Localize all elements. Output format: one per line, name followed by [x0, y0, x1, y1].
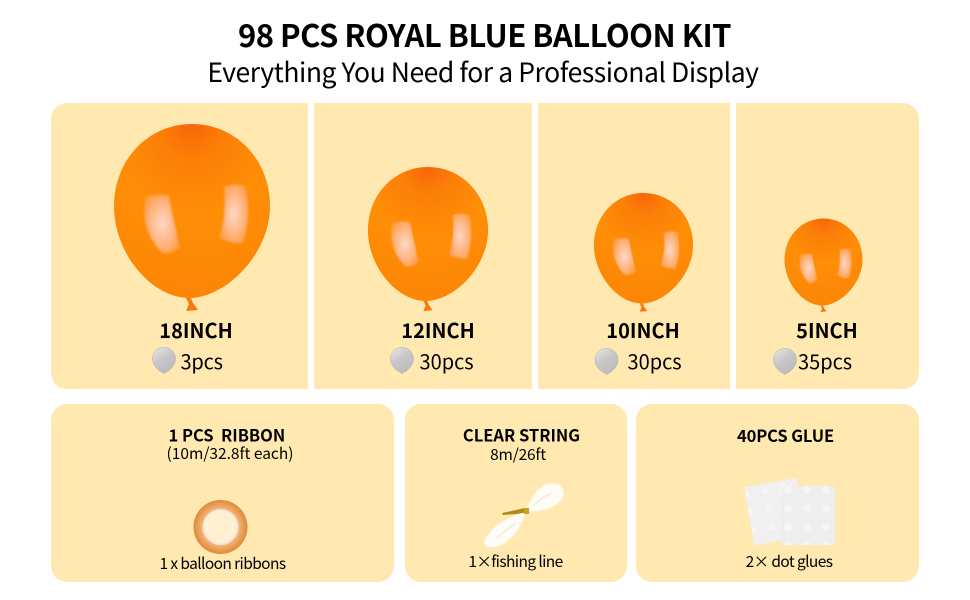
balloon: 18 inch — [114, 124, 270, 311]
balloon: 5 inch — [784, 218, 862, 312]
heading: ribbon: 1 PCS — [168, 422, 214, 446]
panel: 5 inch balloons — [736, 103, 919, 389]
string length: 8m/26ft — [490, 443, 546, 465]
panel: ribbon — [51, 404, 394, 582]
glue caption: 2× dot glues — [746, 550, 833, 572]
panel: clear string — [405, 404, 627, 582]
count: 30pcs: 30pcs — [420, 346, 474, 375]
balloon: 10 inch — [594, 193, 693, 312]
label: 10INCH: 10INCH — [606, 315, 680, 344]
subtitle: Everything You Need for a Professional Display — [207, 51, 759, 90]
ribbon caption: 1 x balloon ribbons — [160, 552, 286, 574]
icon: glue dot sheets — [744, 478, 835, 545]
icon: grey balloon 18 inch — [152, 348, 176, 374]
icon: string bundle — [484, 483, 564, 547]
count: 3pcs: 3pcs — [180, 346, 223, 375]
panel: ribbon: RIBBON — [221, 422, 285, 446]
label: 18INCH: 18INCH — [159, 315, 233, 344]
panel: 10 inch balloons — [538, 103, 730, 389]
count: 35pcs: 35pcs — [798, 346, 852, 375]
label: 5INCH: 5INCH — [796, 315, 858, 344]
title: 98 PCS ROYAL BLUE BALLOON KIT — [238, 11, 731, 56]
count: 30pcs: 30pcs — [628, 346, 682, 375]
ribbon length: (10m/32.8ft each) — [167, 442, 293, 464]
label: 12INCH: 12INCH — [401, 315, 475, 344]
panel: 12 inch balloons — [314, 103, 532, 389]
panel: 18 inch balloons — [51, 103, 308, 389]
icon: ribbon spool — [194, 500, 248, 554]
icon: grey balloon 5 inch — [774, 348, 796, 375]
heading: glue: 40PCS GLUE — [737, 423, 834, 447]
icon: grey balloon 12 inch — [390, 348, 414, 374]
string caption: 1×fishing line — [468, 550, 563, 572]
panel: glue — [636, 404, 919, 582]
balloon: 12 inch — [368, 167, 488, 311]
icon: grey balloon 10 inch — [595, 348, 618, 375]
heading: clear string: CLEAR STRING — [463, 422, 580, 446]
